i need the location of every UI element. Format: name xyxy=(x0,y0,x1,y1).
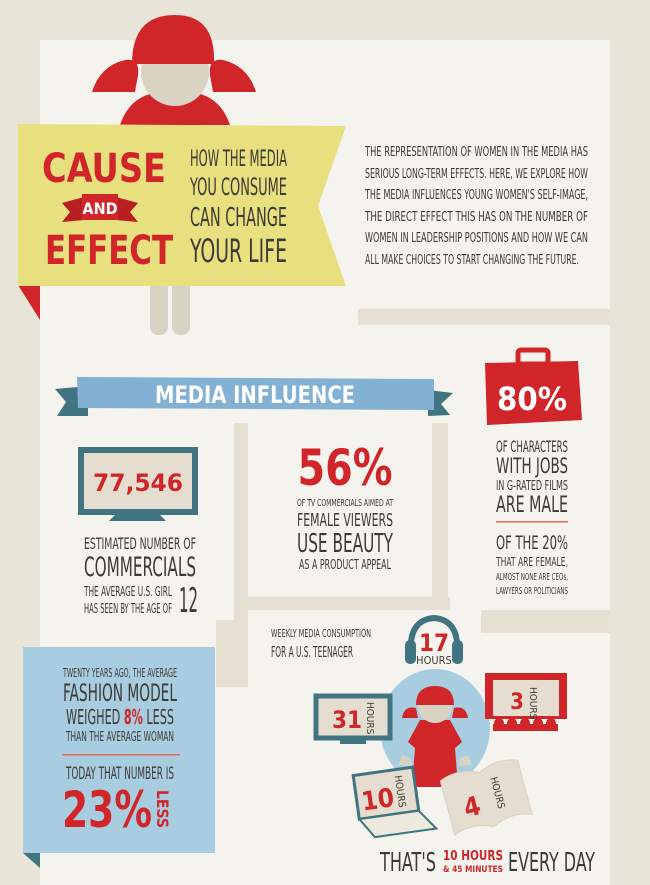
stat: commercials text: COMMERCIALS xyxy=(84,552,196,583)
stat: commercials text xyxy=(83,534,198,621)
media influence ribbon: MEDIA INFLUENCE xyxy=(155,381,355,409)
stat: 80% text: THAT ARE FEMALE, xyxy=(495,555,568,569)
panel: fashion model: WEIGHED 8% LESS xyxy=(66,705,174,729)
weekly media heading: FOR A U.S. TEENAGER xyxy=(271,643,353,661)
icon: headphones 17: 17 xyxy=(419,629,449,657)
stat: 56%: 56% xyxy=(298,439,392,497)
weekly media heading xyxy=(271,627,371,661)
title banner xyxy=(18,124,346,320)
subtitle xyxy=(189,147,287,270)
stat: 56% xyxy=(297,439,393,573)
title: effect: EFFECT xyxy=(45,228,173,274)
stat: 80% text: OF CHARACTERS xyxy=(496,437,568,456)
center girl with oval xyxy=(380,669,490,787)
icon: tv 31 hours: HOURS xyxy=(364,702,375,735)
stat: 80% text: IN G-RATED FILMS xyxy=(496,479,568,494)
icon: theater 3 hours xyxy=(485,673,567,731)
subtitle: CAN CHANGE xyxy=(190,203,287,233)
icon: headphones 17 xyxy=(405,618,463,667)
icon: theater 3 hours: 3 xyxy=(510,690,524,715)
footer: 10 hours every day xyxy=(379,848,595,878)
text: 12 xyxy=(179,581,198,621)
stat: 80% text: ARE MALE xyxy=(496,493,568,518)
panel: fashion model: TODAY THAT NUMBER IS xyxy=(65,764,174,784)
icon: tv 31 hours: 31 xyxy=(332,706,362,734)
stat: 56%: USE BEAUTY xyxy=(297,529,393,559)
stat: 80% text: WITH JOBS xyxy=(496,454,568,478)
briefcase 80%: 80% xyxy=(497,380,567,418)
stat: 56%: AS A PRODUCT APPEAL xyxy=(299,558,391,573)
icon: headphones 17: HOURS xyxy=(416,654,452,667)
ribbon: and: AND xyxy=(82,199,118,218)
icon: tv 31 hours xyxy=(316,696,390,744)
panel: fashion model xyxy=(23,647,215,868)
stat: 56%: OF TV COMMERCIALS AIMED AT xyxy=(297,498,393,509)
subtitle: YOUR LIFE xyxy=(189,232,287,270)
girl figure top xyxy=(92,15,256,335)
panel: fashion model: TWENTY YEARS AGO, THE AVERAGE xyxy=(62,666,177,680)
subtitle: YOU CONSUME xyxy=(189,173,287,201)
weekly media heading: WEEKLY MEDIA CONSUMPTION xyxy=(271,627,371,640)
tv 77,546: 77,546 xyxy=(93,469,183,497)
panel: fashion model: THAN THE AVERAGE WOMAN xyxy=(65,730,174,745)
intro paragraph xyxy=(364,145,588,268)
stat: 80% text: OF THE 20% xyxy=(496,532,568,554)
panel: fashion model: FASHION MODEL xyxy=(63,679,177,707)
stat: 80% text xyxy=(495,437,568,597)
briefcase 80% xyxy=(485,350,582,425)
footer: 10 hours every day: & 45 MINUTES xyxy=(443,865,503,875)
stat: commercials text: THE AVERAGE U.S. GIRL xyxy=(83,585,172,600)
footer: 10 hours every day: EVERY DAY xyxy=(508,848,595,878)
stat: 80% text: LAWYERS OR POLITICIANS xyxy=(496,586,568,597)
decorative bands xyxy=(216,309,610,687)
panel: fashion model: 23% xyxy=(62,781,152,839)
footer: 10 hours every day: THAT'S xyxy=(379,848,436,878)
icon: book 4 hours: HOURS xyxy=(487,776,506,810)
icon: laptop 10 hours xyxy=(353,765,436,839)
footer: 10 hours every day: 10 HOURS xyxy=(443,849,503,864)
ribbon: and xyxy=(62,194,138,222)
stat: commercials text: HAS SEEN BY THE AGE OF xyxy=(84,602,172,617)
icon: laptop 10 hours: HOURS xyxy=(392,775,407,809)
subtitle: HOW THE MEDIA xyxy=(190,147,287,172)
stat: commercials text: ESTIMATED NUMBER OF xyxy=(84,534,196,553)
icon: book 4 hours: 4 xyxy=(461,791,484,824)
title: cause: CAUSE xyxy=(42,146,166,192)
panel: fashion model: LESS xyxy=(153,790,172,828)
icon: book 4 hours xyxy=(439,757,533,837)
icon: theater 3 hours: HOURS xyxy=(527,687,538,720)
tv 77,546 xyxy=(81,450,195,521)
icon: laptop 10 hours: 10 xyxy=(360,783,396,818)
media influence ribbon xyxy=(55,377,453,416)
stat: 56%: FEMALE VIEWERS xyxy=(297,510,393,531)
stat: 80% text: ALMOST NONE ARE CEOs, xyxy=(496,572,568,583)
